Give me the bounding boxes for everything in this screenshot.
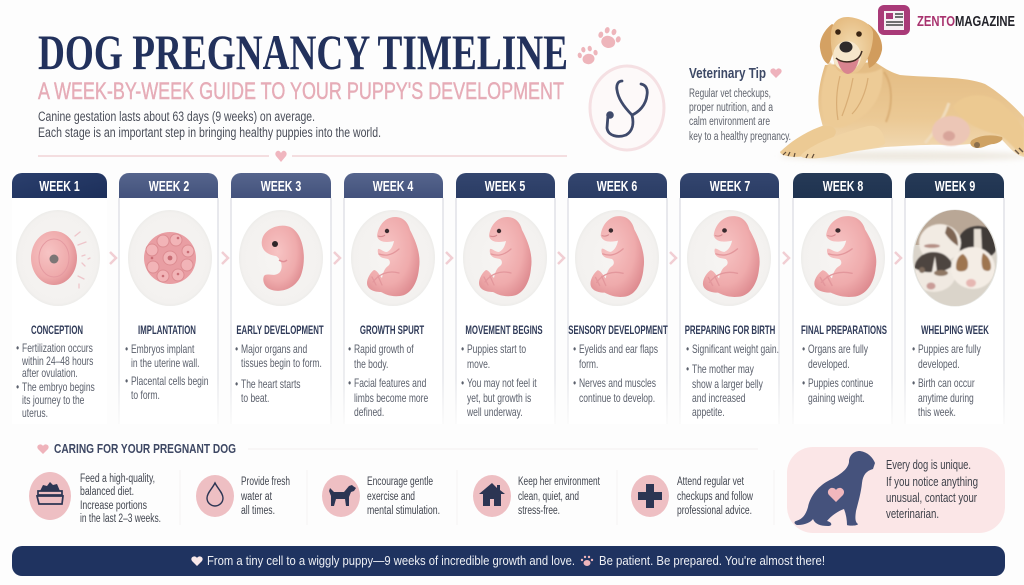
week 3 notes: •	[235, 344, 238, 356]
callout text	[886, 457, 978, 521]
lower hind leg and paw	[970, 135, 1002, 148]
care text: Keep her environment	[518, 476, 601, 488]
banner paw	[581, 556, 593, 566]
panel: week 9	[905, 173, 1004, 424]
shoulder line	[884, 72, 891, 122]
panel: week 8	[793, 173, 892, 424]
week 7 notes: •	[686, 344, 689, 356]
care item: environment	[473, 475, 601, 517]
week 1 notes: within 24–48 hours	[21, 356, 93, 368]
care item: vet checkups	[631, 475, 754, 517]
callout text: Every dog is unique.	[886, 457, 971, 472]
week 3 heading: EARLY DEVELOPMENT	[236, 325, 324, 338]
week 9 header: WEEK 9	[935, 178, 975, 194]
week 8 notes: Puppies continue	[808, 378, 874, 390]
week 7 notes: Significant weight gain.	[692, 344, 779, 356]
care text	[677, 476, 754, 517]
week 1 header	[12, 173, 107, 198]
panel: week 5	[456, 173, 555, 424]
arrow	[222, 252, 228, 264]
week 1 notes: its journey to the	[22, 395, 85, 407]
care text: water at	[240, 491, 273, 503]
neck and chest fur	[821, 62, 883, 128]
week 9 heading: WHELPING WEEK	[921, 325, 989, 338]
week 5 header	[456, 173, 555, 198]
week 1 notes: Fertilization occurs	[22, 343, 93, 355]
arrow	[110, 252, 116, 264]
callout text: If you notice anything	[886, 474, 978, 489]
week 7 notes: appetite.	[692, 407, 725, 419]
care item: diet	[29, 472, 161, 525]
veterinary tip	[689, 65, 791, 143]
week 3 header: WEEK 3	[261, 178, 301, 194]
week 3 illustration: early embryo	[239, 210, 323, 306]
week 4 notes: •	[348, 344, 351, 356]
week 8 notes: developed.	[808, 359, 850, 371]
week 2 illustration: cell cluster	[128, 210, 212, 306]
tip text: proper nutrition, and a	[689, 102, 773, 114]
care text: mental stimulation.	[367, 505, 440, 517]
week 4 notes: Facial features and	[354, 378, 426, 390]
arrow	[334, 252, 340, 264]
icon: dog	[322, 475, 360, 517]
week 5 illustration: fetus	[463, 210, 547, 306]
care text: exercise and	[367, 491, 415, 503]
week 6 notes: •	[573, 378, 576, 390]
tip text: Regular vet checkups,	[689, 88, 771, 100]
care text: balanced diet.	[80, 486, 134, 498]
care text: Increase portions	[80, 500, 147, 512]
callout: every dog is unique	[787, 447, 1005, 533]
care text: Attend regular vet	[677, 476, 745, 488]
week 5 notes: well underway.	[466, 407, 523, 419]
week 4 notes: •	[348, 378, 351, 390]
week 8 header	[793, 173, 892, 198]
week 5 notes: •	[461, 344, 464, 356]
care text: in the last 2–3 weeks.	[80, 513, 161, 525]
care text: professional advice.	[677, 505, 752, 517]
banner text one: From a tiny cell to a wiggly puppy—9 weeks of incredible growth and love.	[207, 553, 575, 568]
tip heart	[770, 68, 782, 78]
week 1 notes: •	[16, 343, 19, 355]
week 3 notes: Major organs and	[241, 344, 307, 356]
banner heart	[191, 556, 203, 566]
week 2 notes: in the uterine wall.	[131, 358, 200, 370]
week 6 heading: SENSORY DEVELOPMENT	[568, 325, 668, 338]
week 3 header	[231, 173, 331, 198]
week 2 notes: Placental cells begin	[131, 376, 209, 388]
week 9 notes: developed.	[918, 359, 960, 371]
week 3 notes: •	[235, 379, 238, 391]
care text: clean, quiet, and	[518, 491, 579, 503]
care section heading: CARING FOR YOUR PREGNANT DOG	[54, 441, 236, 456]
week 2 notes	[125, 344, 209, 402]
week 2 header: WEEK 2	[149, 178, 189, 194]
week 8 notes: •	[802, 344, 805, 356]
golden retriever	[780, 17, 1024, 161]
week 4 notes	[348, 344, 429, 419]
week 2 heading: IMPLANTATION	[138, 325, 196, 338]
intro text: Each stage is an important step in bringing healthy puppies into the world.	[38, 125, 381, 140]
week 4 header: WEEK 4	[373, 178, 413, 194]
week 6 notes: •	[573, 344, 576, 356]
tip text	[689, 88, 791, 143]
week 4 heading: GROWTH SPURT	[360, 325, 424, 338]
panel: week 4	[344, 173, 443, 424]
head	[831, 17, 873, 74]
arrow	[446, 252, 452, 264]
week 4 notes: Rapid growth of	[354, 344, 414, 356]
week 6 notes	[573, 344, 658, 405]
week 7 header: WEEK 7	[710, 178, 750, 194]
week 1 notes: •	[16, 382, 19, 394]
week 9 notes: this week.	[918, 407, 956, 419]
care text: all times.	[241, 505, 275, 517]
callout text: unusual, contact your	[886, 490, 977, 505]
week 4 notes: the body.	[354, 359, 388, 371]
week 9 illustration: sleeping puppies	[912, 210, 998, 306]
subtitle: A WEEK-BY-WEEK GUIDE TO YOUR PUPPY'S DEVELOPMENT	[38, 78, 564, 105]
icon: food bowl	[29, 472, 71, 520]
week 6 illustration: fetus	[575, 210, 659, 306]
panel: week 1	[12, 173, 107, 424]
week 9 notes: •	[912, 378, 915, 390]
callout text: veterinarian.	[886, 506, 939, 521]
intro text: Canine gestation lasts about 63 days (9 weeks) on average.	[38, 109, 315, 124]
week 1 heading: CONCEPTION	[31, 325, 83, 338]
week 4 header	[344, 173, 443, 198]
tip text: calm environment are	[689, 116, 770, 128]
week 7 header	[680, 173, 779, 198]
tip heading: Veterinary Tip	[689, 65, 766, 82]
week 7 illustration: fetus	[687, 210, 771, 306]
logo: ZentoMagazine	[878, 5, 1015, 35]
week 5 header: WEEK 5	[485, 178, 525, 194]
week 8 notes	[802, 344, 874, 405]
week 5 heading: MOVEMENT BEGINS	[465, 325, 543, 338]
week 1 illustration: fertilized egg	[16, 210, 100, 306]
care item: exercise	[322, 475, 440, 517]
week 4 notes: limbs become more	[354, 393, 429, 405]
title: DOG PREGNANCY TIMELINE	[38, 24, 568, 80]
intro text	[38, 109, 381, 140]
care item: water	[196, 475, 290, 517]
week 8 notes: gaining weight.	[808, 393, 865, 405]
week 6 notes: Eyelids and ear flaps	[579, 344, 658, 356]
week 8 notes: •	[802, 378, 805, 390]
icon: medical cross	[631, 475, 669, 517]
panel: week 2	[119, 173, 218, 424]
icon: water drop	[196, 475, 234, 517]
icon: stethoscope	[590, 66, 664, 150]
body	[780, 62, 1024, 157]
care text	[240, 476, 290, 517]
week 7 heading: PREPARING FOR BIRTH	[685, 325, 775, 338]
week 9 header	[905, 173, 1004, 198]
week 6 header	[568, 173, 667, 198]
tip text: key to a healthy pregnancy.	[689, 131, 791, 143]
care text: Feed a high-quality,	[80, 473, 155, 485]
week 2 notes: •	[125, 344, 128, 356]
week 9 notes	[912, 344, 982, 419]
week 7 notes: show a larger belly	[692, 379, 764, 391]
week 2 notes: Embryos implant	[131, 344, 194, 356]
week 8 illustration: fetus	[801, 210, 885, 306]
week 8 notes: Organs are fully	[808, 344, 869, 356]
week 1 notes: after ovulation.	[22, 368, 78, 380]
care text: stress-free.	[518, 505, 560, 517]
week 7 notes	[686, 344, 779, 419]
panel: week 3	[231, 173, 331, 424]
week 4 illustration: fetus	[351, 210, 435, 306]
week 5 notes	[461, 344, 537, 419]
panel: week 6	[568, 173, 668, 424]
week 9 notes: anytime during	[918, 393, 974, 405]
week 7 notes: and increased	[692, 393, 745, 405]
week 5 notes: yet, but growth is	[467, 393, 531, 405]
week 1 header: WEEK 1	[39, 178, 80, 194]
pink belly	[932, 116, 970, 146]
arrow	[895, 252, 901, 264]
icon: dog silhouette with heart	[795, 451, 875, 526]
week 2 notes: •	[125, 376, 128, 388]
week 3 notes: to beat.	[241, 393, 269, 405]
arrow	[670, 252, 676, 264]
week 4 notes: defined.	[354, 407, 384, 419]
week 9 notes: Puppies are fully	[918, 344, 982, 356]
week 5 notes: You may not feel it	[467, 378, 537, 390]
icon: paw prints	[576, 25, 623, 66]
week 2 header	[119, 173, 218, 198]
care text	[518, 476, 601, 517]
ears	[820, 24, 836, 64]
front legs	[780, 126, 836, 157]
week 6 notes: Nerves and muscles	[579, 378, 656, 390]
week 9 notes: •	[912, 344, 915, 356]
week 6 header: WEEK 6	[597, 178, 637, 194]
week 2 notes: to form.	[131, 390, 160, 402]
week 5 notes: Puppies start to	[467, 344, 526, 356]
week 3 notes: tissues begin to form.	[241, 358, 322, 370]
care text: checkups and follow	[677, 491, 754, 503]
week 8 header: WEEK 8	[823, 178, 863, 194]
week 7 notes: The mother may	[692, 364, 755, 376]
week 3 notes: The heart starts	[241, 379, 301, 391]
week 7 notes: •	[686, 364, 689, 376]
header divider with heart	[38, 151, 567, 162]
care text: Provide fresh	[241, 476, 290, 488]
week 6 notes: continue to develop.	[579, 393, 655, 405]
week 1 notes	[16, 343, 95, 420]
banner text two: Be patient. Be prepared. You're almost there!	[599, 553, 825, 568]
logo icon	[878, 5, 910, 35]
week 5 notes: •	[461, 378, 464, 390]
care text: Encourage gentle	[367, 476, 433, 488]
footer banner	[12, 546, 1005, 576]
arrow	[783, 252, 789, 264]
icon: house	[473, 475, 511, 517]
thigh	[953, 95, 1024, 156]
week 3 notes	[235, 344, 322, 405]
week 1 notes: The embryo begins	[22, 382, 95, 394]
week 9 notes: Birth can occur	[918, 378, 975, 390]
panel: week 7	[680, 173, 779, 424]
week 6 notes: form.	[579, 359, 598, 371]
arrow	[558, 252, 564, 264]
care text	[367, 476, 440, 517]
care text	[80, 473, 161, 525]
week 1 notes: uterus.	[22, 408, 48, 420]
week 5 notes: move.	[467, 359, 490, 371]
care section heading	[37, 441, 758, 456]
week 8 heading: FINAL PREPARATIONS	[801, 325, 887, 338]
